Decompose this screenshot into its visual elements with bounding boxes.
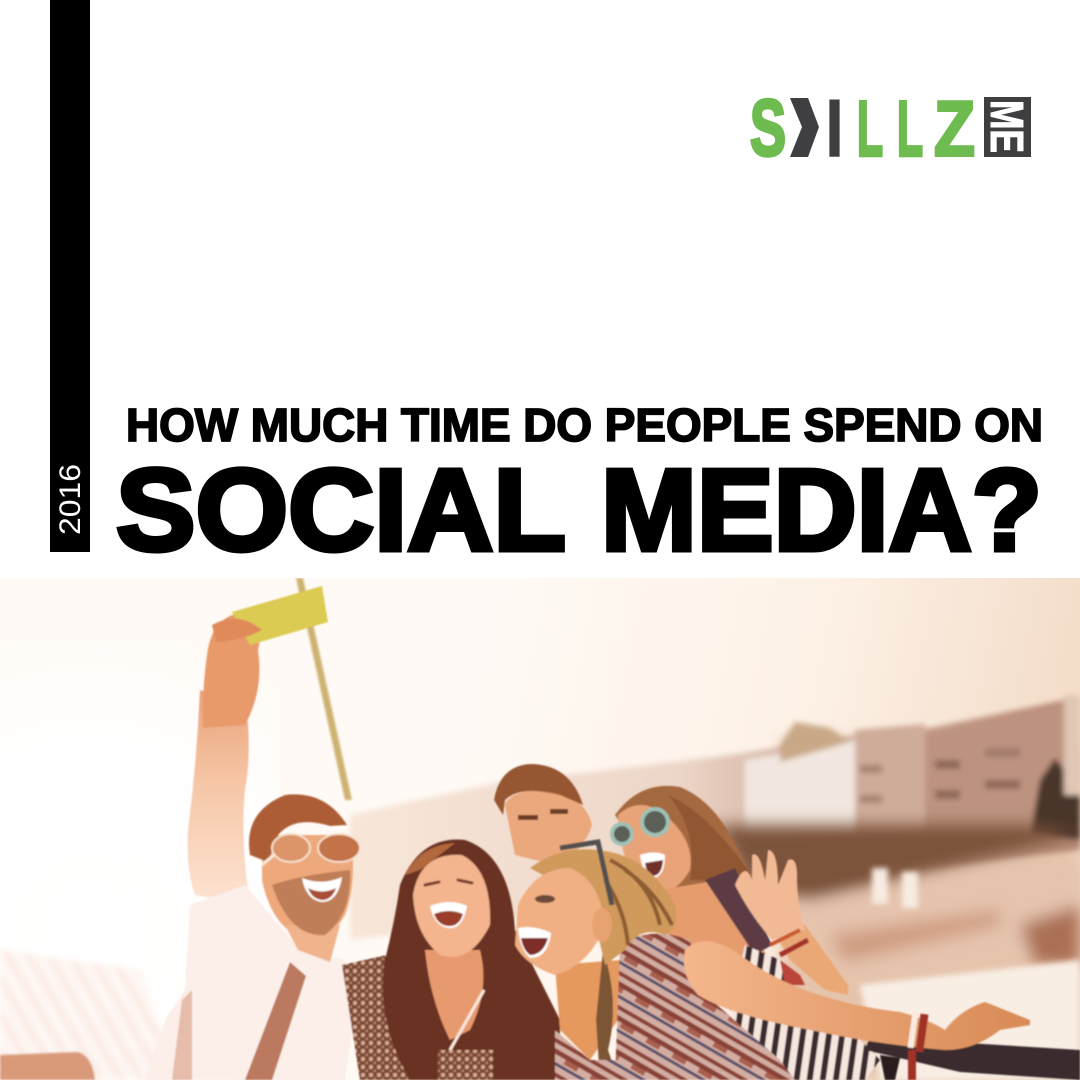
bag strap xyxy=(705,868,772,955)
shirt xyxy=(145,885,357,1080)
white glow on left xyxy=(0,738,280,1022)
shoulder neck xyxy=(555,960,625,1060)
mouth xyxy=(640,852,665,878)
mouth xyxy=(302,877,342,902)
logo: SKILLZ ME: ME xyxy=(981,100,1033,153)
neck xyxy=(285,925,340,962)
hand xyxy=(203,612,260,728)
round sunglasses xyxy=(642,809,668,835)
red cord xyxy=(780,960,805,985)
hair strand left highlight xyxy=(405,843,455,875)
patterned top xyxy=(615,934,795,1080)
woman with long dark hair xyxy=(342,840,560,1080)
head xyxy=(262,835,353,940)
face xyxy=(515,868,605,975)
white boats xyxy=(872,868,918,908)
hair back xyxy=(615,786,750,900)
eyes xyxy=(425,880,472,885)
trees and embankment xyxy=(715,825,1080,985)
woman with round sunglasses xyxy=(612,786,772,960)
buildings xyxy=(350,695,1080,940)
photo: friends taking a selfie xyxy=(0,578,1080,1080)
neck and chest xyxy=(425,950,483,1040)
title line 1: HOW MUCH TIME DO PEOPLE SPEND ON xyxy=(126,399,1043,451)
lower right warm tone xyxy=(780,740,1080,1080)
logo: SKILLZ ME: I xyxy=(827,84,842,172)
water xyxy=(860,960,1080,1080)
man with raised phone xyxy=(145,586,360,1080)
logo: SKILLZ ME: Z xyxy=(934,84,975,172)
bottom left object xyxy=(0,1052,95,1080)
logo: SKILLZ ME: L xyxy=(897,84,923,172)
ear xyxy=(592,908,612,942)
dreadlocks hair xyxy=(530,849,676,965)
railing xyxy=(865,1037,1080,1080)
logo: SKILLZ ME: S xyxy=(750,83,786,172)
selfie group xyxy=(145,586,1080,1080)
stretched arm xyxy=(684,941,1030,1050)
arm xyxy=(188,690,250,905)
striped top xyxy=(730,945,880,1080)
bracelets xyxy=(908,1012,918,1048)
face xyxy=(413,855,490,957)
sunglasses on head xyxy=(560,842,612,905)
bottom left brick haze xyxy=(0,950,161,1080)
beard xyxy=(272,870,350,935)
sky xyxy=(0,578,1080,1080)
mouth xyxy=(518,927,551,958)
backpack strap xyxy=(245,962,306,1080)
waving arm and hand xyxy=(735,850,848,995)
braid xyxy=(596,950,618,1080)
eye xyxy=(535,895,555,903)
man in the back xyxy=(494,764,592,865)
title: MEDIA? xyxy=(601,445,1042,575)
year side bar xyxy=(50,0,90,552)
aviator sunglasses xyxy=(272,834,310,862)
hair xyxy=(383,840,560,1080)
thumb xyxy=(212,619,262,642)
necklace strap xyxy=(450,990,484,1050)
year label: 2016 xyxy=(54,464,87,535)
logo: SKILLZ ME: L xyxy=(857,84,883,172)
title xyxy=(116,399,1043,575)
phone xyxy=(232,586,328,645)
blonde woman in front xyxy=(515,842,1030,1080)
body lace top xyxy=(341,954,411,1080)
street pole xyxy=(296,578,352,800)
face xyxy=(618,805,691,892)
logo: SKILLZ ME xyxy=(750,83,1033,172)
hair right xyxy=(668,795,752,880)
lace lower xyxy=(438,1050,493,1080)
hair xyxy=(249,794,347,862)
title line 2: SOCIAL xyxy=(116,445,566,575)
chest xyxy=(660,880,770,960)
laughing mouth xyxy=(430,902,467,928)
